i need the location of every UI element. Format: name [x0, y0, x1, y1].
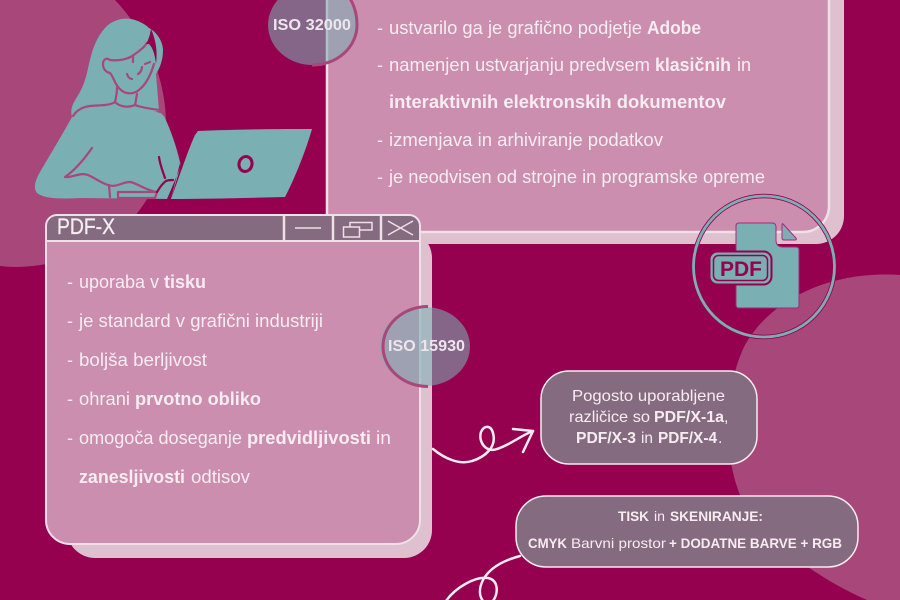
list item: original shape: - [67, 389, 73, 409]
hair [71, 19, 163, 118]
badge: ISO 32000 [268, 0, 357, 65]
list item: predictability: zanesljivosti [79, 467, 185, 487]
list item: independence: je neodvisen od strojne in programske opreme [388, 167, 765, 187]
list item: predictability: odtisov [191, 467, 250, 487]
panel: PDF description [327, 0, 844, 244]
illustration: woman working on laptop [35, 19, 312, 199]
list item: original shape [67, 389, 261, 409]
icon: PDF document: PDF [720, 258, 762, 281]
list item: predictability: in [376, 428, 391, 448]
callout: PDF/X variants: različice so [569, 409, 650, 426]
badge: ISO 15930: ISO 15930 [388, 338, 465, 355]
list item: original shape: prvotno obliko [135, 389, 261, 409]
callout: print and scanning: SKENIRANJE: [670, 508, 763, 524]
callout: PDF/X variants [541, 371, 757, 464]
dark wedge between torso and laptop [167, 147, 181, 199]
hair strand [146, 29, 157, 64]
badge: ISO 15930 [380, 306, 470, 386]
arm and hand lines [157, 157, 173, 192]
list item: readability: boljša berljivost [79, 350, 207, 370]
list item: purpose: - [377, 55, 383, 75]
arrow: from print and scanning callout [446, 556, 520, 600]
torso [35, 102, 181, 199]
laptop [171, 129, 312, 199]
callout: PDF/X variants: Pogosto uporabljene [572, 388, 725, 405]
callout: print and scanning: CMYK [528, 535, 567, 551]
window body [46, 241, 420, 544]
window title bar [46, 215, 420, 241]
callout: PDF/X variants: PDF/X-3 [576, 430, 636, 447]
list item: exchange: - [377, 130, 383, 150]
callout: print and scanning: TISK [618, 508, 649, 524]
callout: PDF/X variants: . [718, 430, 722, 447]
list item: exchange: izmenjava in arhiviranje podatkov [389, 130, 663, 150]
panel shadow [340, 0, 844, 244]
window shadow [67, 230, 432, 558]
list item: predictability: - [67, 428, 73, 448]
list item: print: uporaba v [79, 272, 159, 292]
laptop logo [237, 155, 254, 173]
document corner [782, 224, 796, 240]
list item: purpose: in [737, 55, 751, 75]
document sheet [736, 223, 799, 308]
list item: standard: je standard v grafični industriji [78, 311, 323, 331]
list item: Adobe: - [377, 18, 383, 38]
list item: print: tisku [164, 272, 206, 292]
body outlines [65, 43, 164, 198]
window buttons [284, 215, 413, 241]
list item: predictability: omogoča doseganje [79, 428, 242, 448]
PDF label [710, 252, 772, 284]
list item: print [67, 272, 206, 292]
callout: print and scanning: Barvni prostor [571, 535, 666, 551]
callout: PDF/X variants: in [641, 430, 653, 447]
icon: PDF document [694, 196, 834, 337]
list item: Adobe: Adobe [647, 18, 701, 38]
background blob: bottom right [728, 274, 900, 600]
list item: original shape: ohrani [79, 389, 130, 409]
list item: purpose [377, 55, 751, 112]
callout: PDF/X variants: PDF/X-1a [654, 409, 724, 426]
callout: print and scanning [516, 496, 858, 567]
list item: independence: - [377, 167, 383, 187]
list item: purpose: namenjen ustvarjanju predvsem [389, 55, 650, 75]
list item: readability: - [67, 350, 73, 370]
list item: purpose: interaktivnih elektronskih dokumentov [389, 92, 726, 112]
list item: predictability: predvidljivosti [247, 428, 371, 448]
icon ring [694, 196, 834, 337]
list item: predictability [67, 428, 391, 487]
panel: PDF-X window [46, 214, 432, 558]
callout: PDF/X variants: PDF/X-4 [658, 430, 717, 447]
list item: Adobe: ustvarilo ga je grafično podjetje [389, 18, 642, 38]
list item: print: - [67, 272, 73, 292]
list item: purpose: klasičnih [655, 55, 731, 75]
background blob: top left [0, 0, 166, 267]
list item: standard: - [67, 311, 73, 331]
arrow: to PDF/X variants [433, 427, 533, 462]
callout: print and scanning: + DODATNE BARVE + RGB [669, 535, 842, 551]
panel body [327, 0, 829, 232]
badge: ISO 32000: ISO 32000 [273, 17, 351, 34]
window title: PDF-X [57, 214, 115, 239]
callout: PDF/X variants: , [724, 409, 728, 426]
callout: print and scanning: in [654, 508, 665, 524]
